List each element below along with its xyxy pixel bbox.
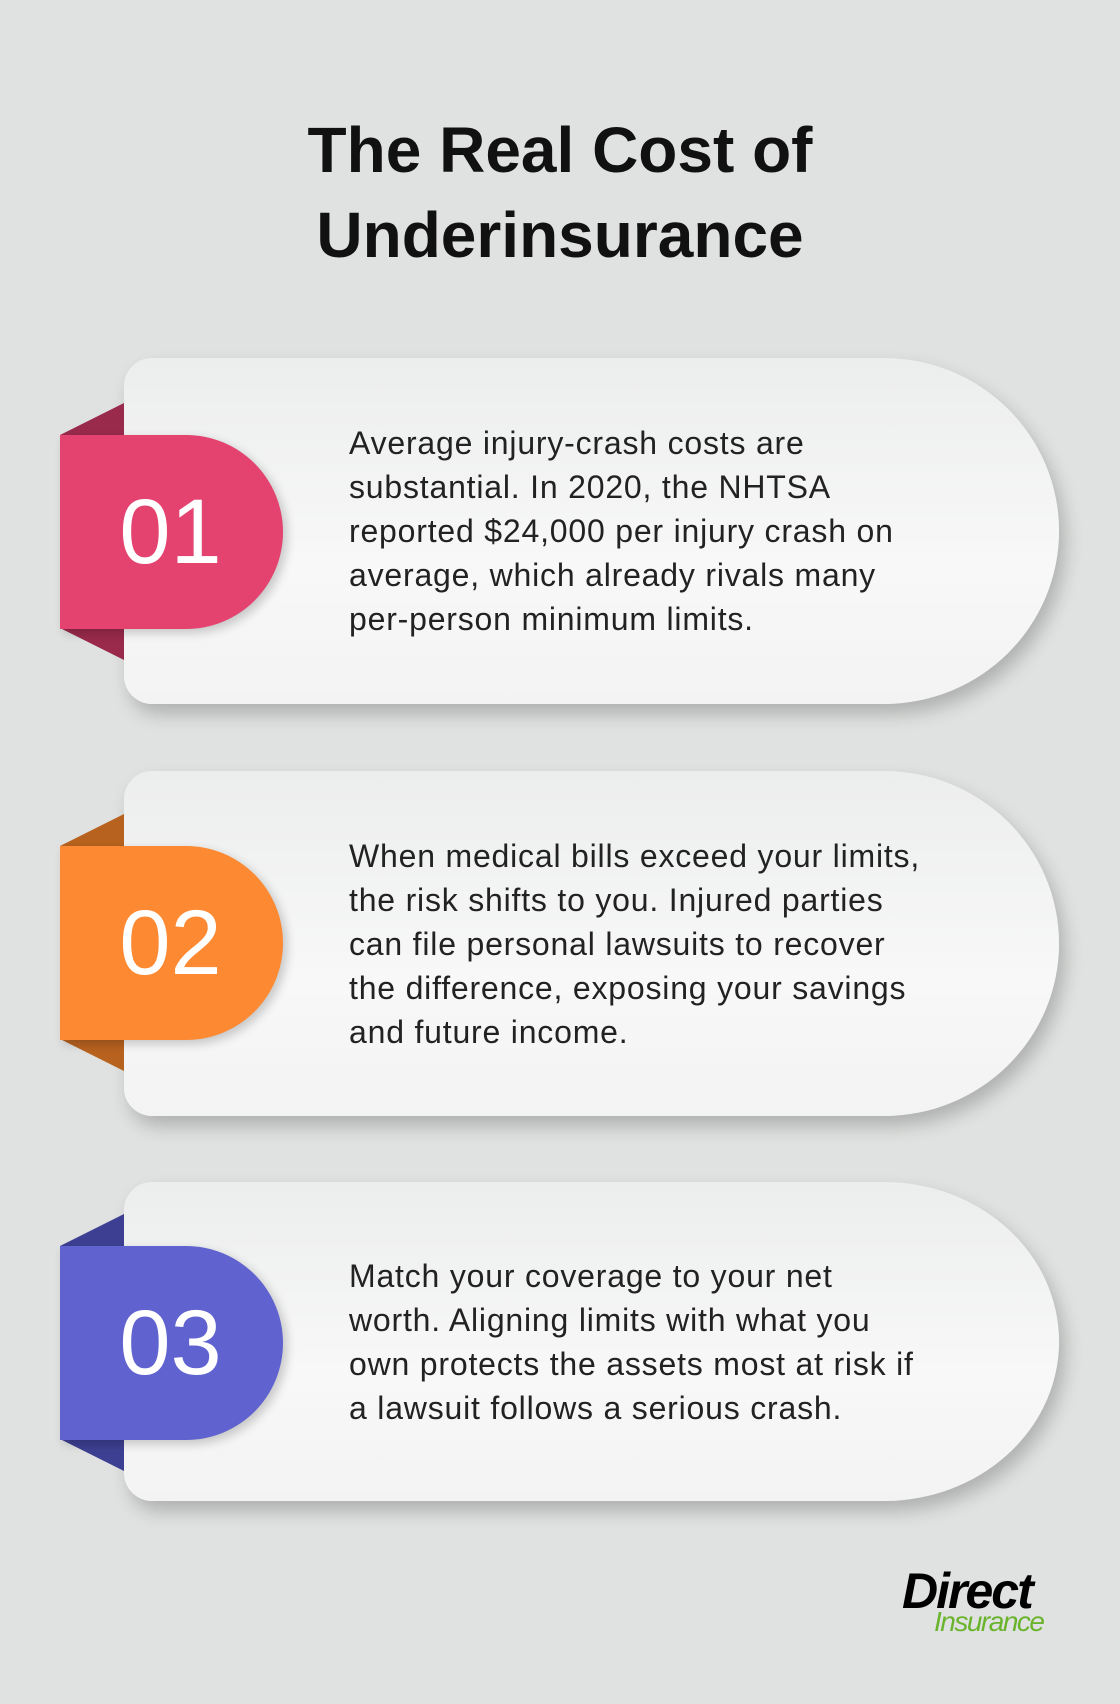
logo: Direct (902, 1563, 1032, 1619)
badge: 02: 02 (119, 892, 222, 994)
text: card 1: average, which already rivals many (349, 557, 876, 593)
text: card 2: can file personal lawsuits to recover (349, 926, 886, 962)
logo: Insurance (934, 1606, 1043, 1637)
fold: card 1 top (60, 403, 124, 435)
badge: 03 (60, 1246, 283, 1440)
badge: 02 (60, 846, 283, 1040)
title: The Real Cost of (308, 114, 812, 186)
text: card 3: Match your coverage to your net (349, 1258, 833, 1294)
title (308, 114, 813, 271)
fold: card 1 bottom (62, 629, 124, 660)
text: card 3: worth. Aligning limits with what you (349, 1302, 870, 1338)
title: Underinsurance (316, 199, 804, 271)
text: card 1: per-person minimum limits. (349, 601, 754, 637)
badge: 01: 01 (119, 481, 222, 583)
text: card 1: substantial. In 2020, the NHTSA (349, 469, 831, 505)
panel: card 1 (124, 358, 1059, 704)
text: card 2: and future income. (349, 1014, 628, 1050)
text: card 3: own protects the assets most at risk if (349, 1346, 914, 1382)
text: card 1: Average injury-crash costs are (349, 425, 805, 461)
badge: 03: 03 (119, 1292, 222, 1394)
fold: card 3 top (60, 1214, 124, 1246)
text: card 2: the risk shifts to you. Injured parties (349, 882, 884, 918)
logo (902, 1563, 1044, 1637)
text: card 3 (349, 1258, 914, 1426)
text: card 3: a lawsuit follows a serious crash. (349, 1390, 842, 1426)
fold: card 2 top (60, 814, 124, 846)
text: card 2 (349, 838, 920, 1050)
panel: card 2 (124, 771, 1059, 1116)
text: card 2: the difference, exposing your savings (349, 970, 906, 1006)
panel: card 3 (124, 1182, 1059, 1501)
fold: card 3 bottom (62, 1440, 124, 1471)
badge: 01 (60, 435, 283, 629)
text: card 2: When medical bills exceed your limits, (349, 838, 920, 874)
text: card 1: reported $24,000 per injury crash on (349, 513, 894, 549)
fold: card 2 bottom (62, 1040, 124, 1071)
text: card 1 (349, 425, 894, 637)
